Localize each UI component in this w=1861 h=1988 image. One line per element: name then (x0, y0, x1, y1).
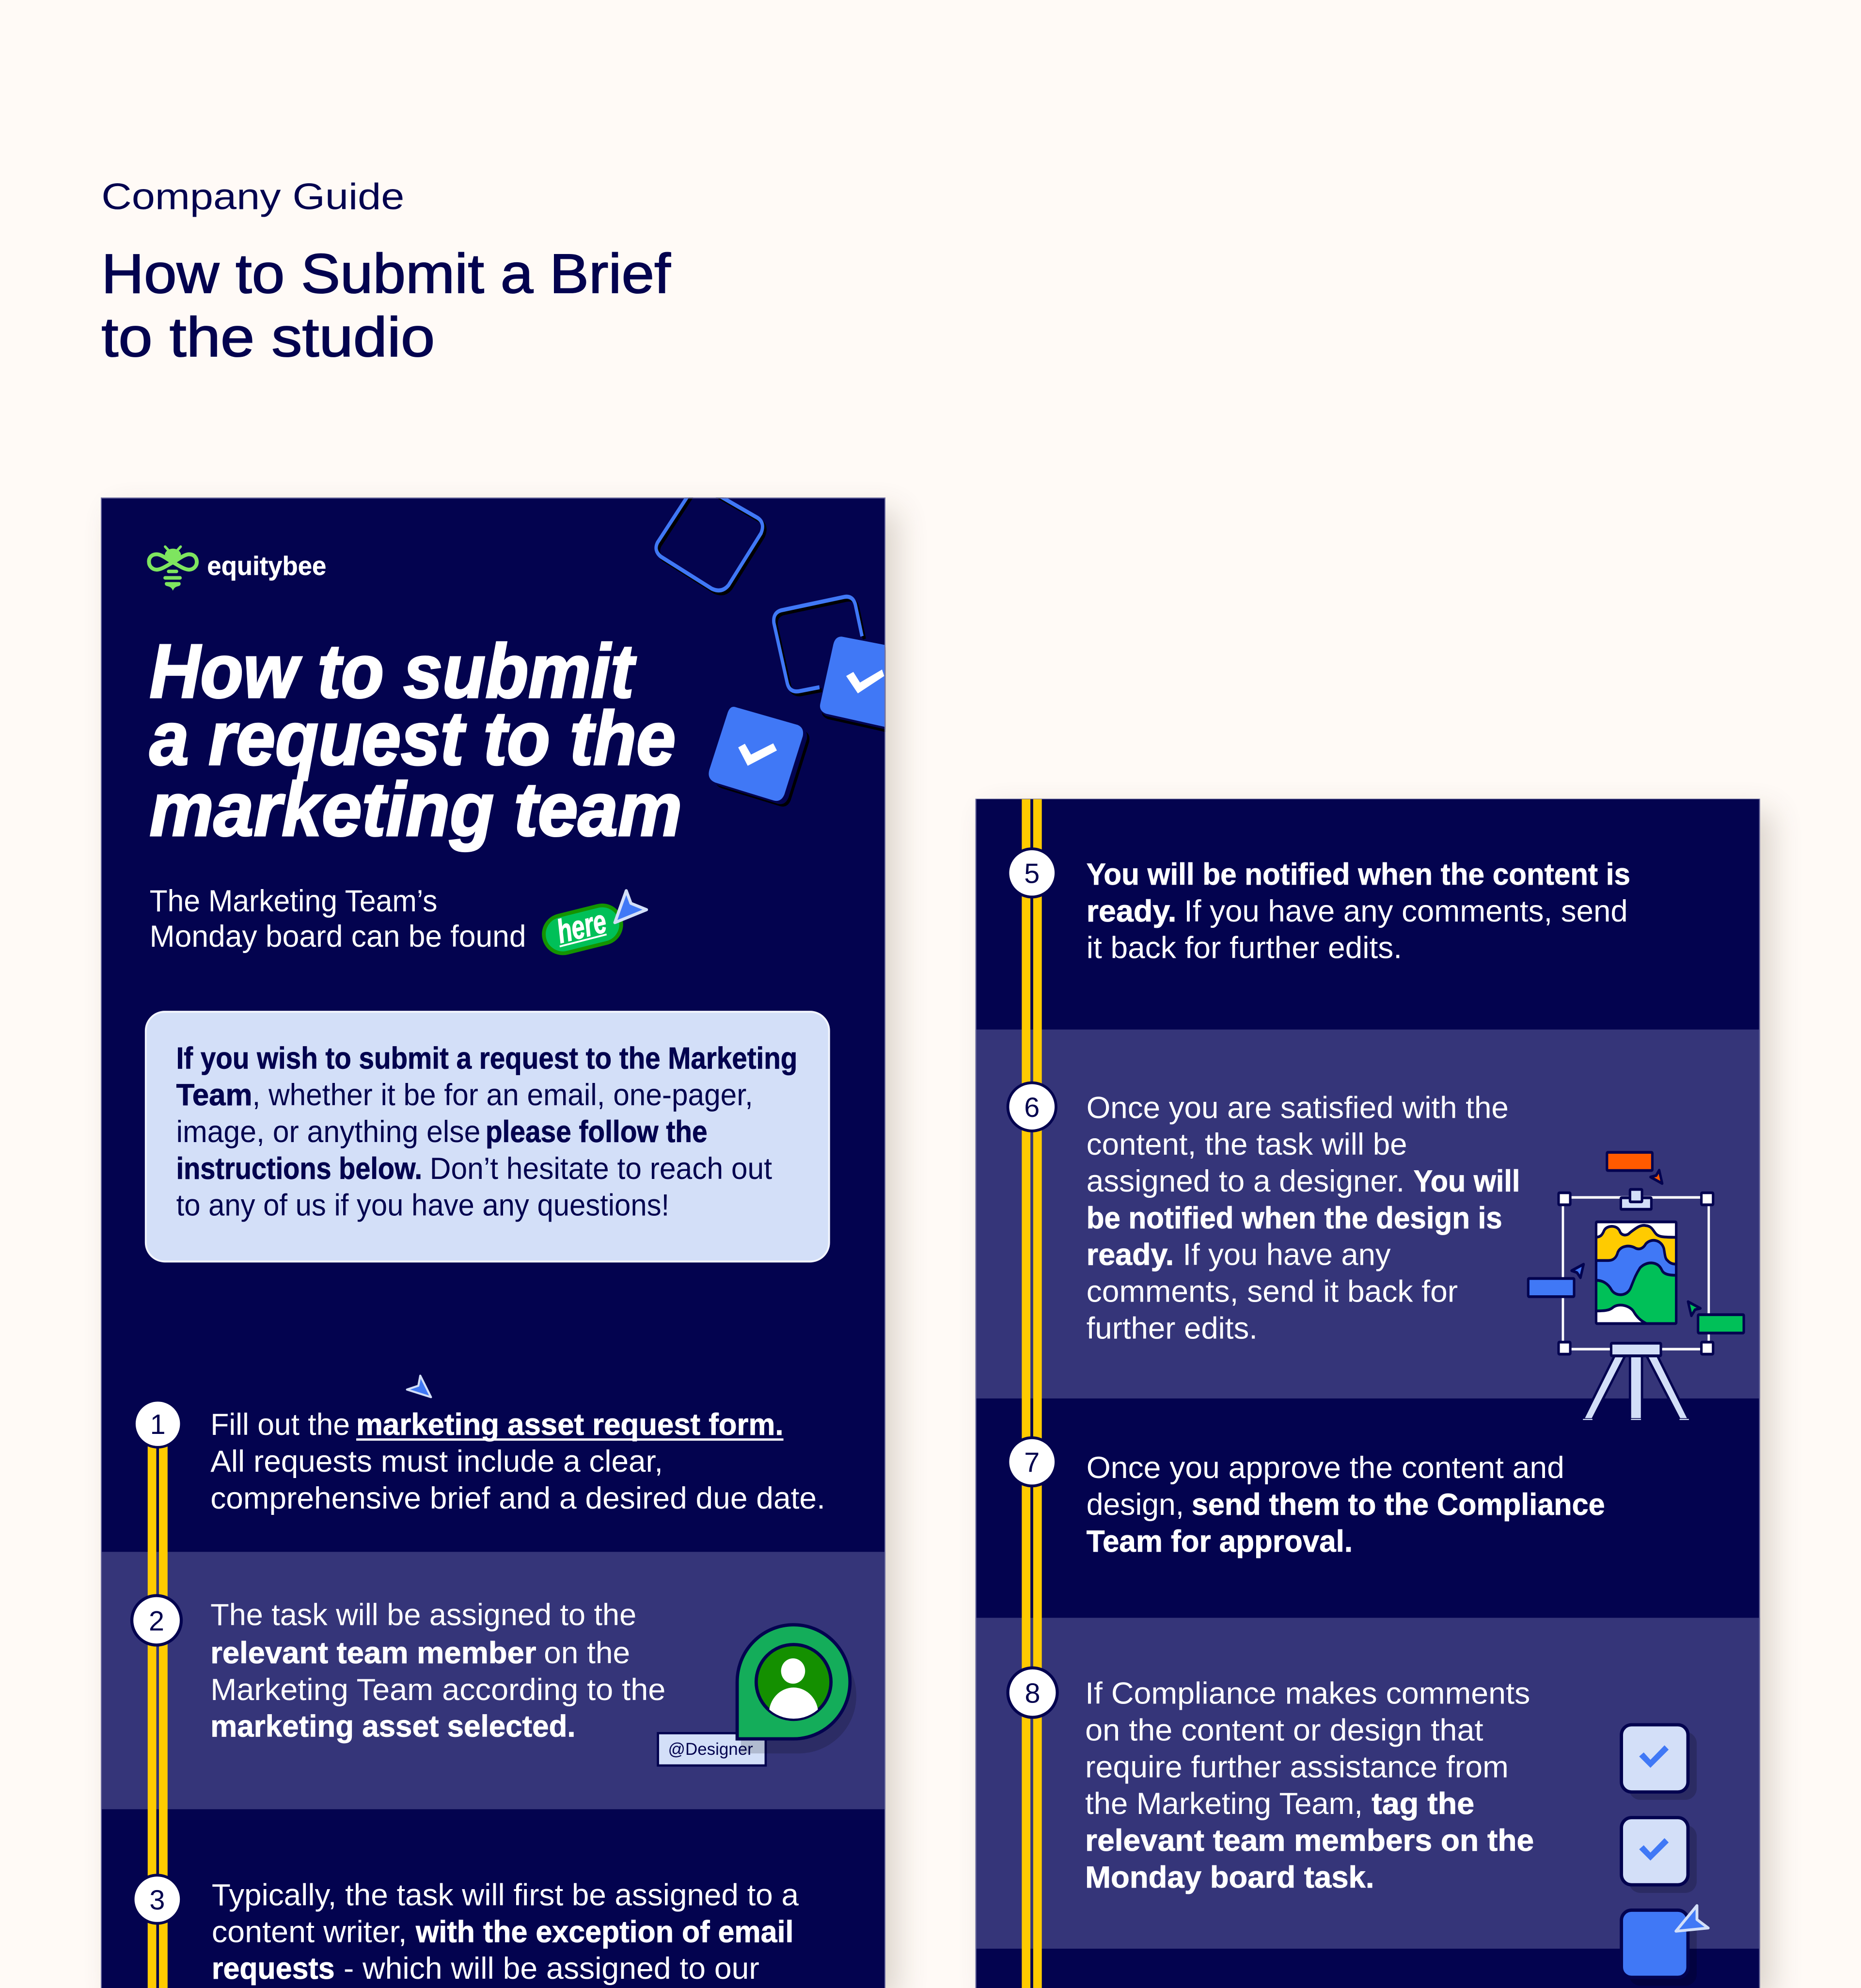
step 5 text: You will be notified when the content is (1087, 858, 1630, 891)
step 8 text: tag the (1372, 1787, 1474, 1821)
page heading (101, 176, 671, 368)
step 7 text (1087, 1451, 1605, 1559)
green label and cursor (1688, 1302, 1744, 1333)
step 6 text (1087, 1091, 1520, 1345)
button: here (540, 891, 647, 957)
panel background (101, 497, 885, 1988)
headline: marketing team (150, 767, 682, 852)
callout: intro box: Team (176, 1078, 252, 1112)
icons: floating checkboxes (656, 482, 887, 807)
step 1 (134, 1400, 825, 1515)
callout: intro box: , whether it be for an email, one-pager, (252, 1078, 753, 1112)
step 3 text (212, 1878, 799, 1986)
callout: intro box: to any of us if you have any questions! (176, 1189, 669, 1223)
badge 7: 7 (1024, 1447, 1040, 1479)
badge 1 (134, 1400, 181, 1447)
step 2 text: The task will be assigned to the (210, 1598, 636, 1632)
badge 3 (133, 1875, 181, 1924)
step 6 band (976, 1030, 1760, 1399)
tag: @Designer (658, 1733, 766, 1765)
callout: intro box: Don’t hesitate to reach out (430, 1152, 772, 1186)
wordmark: equitybee (207, 551, 326, 581)
badge 3: 3 (149, 1885, 165, 1916)
callout: intro box: instructions below. (176, 1152, 422, 1186)
step 2 text: Marketing Team according to the (210, 1673, 665, 1707)
badge 7 (1008, 1438, 1056, 1486)
icon: designer pin (658, 1625, 856, 1765)
badge 1: 1 (150, 1409, 166, 1440)
step 6 text: If you have any (1183, 1238, 1391, 1272)
panel border (101, 498, 885, 1988)
easel clamp (1621, 1190, 1651, 1209)
step 8 (1008, 1668, 1708, 1986)
step 7 text: Once you approve the content and (1087, 1451, 1564, 1485)
icon: bee (149, 547, 197, 591)
callout: intro box (146, 1012, 829, 1261)
step 6 text: be notified when the design is (1087, 1201, 1502, 1235)
step 8 text: If Compliance makes comments (1085, 1677, 1530, 1711)
step 1 text: Fill out the (210, 1408, 350, 1442)
callout: intro box: If you wish to submit a request to the Marketing (176, 1041, 797, 1075)
icon: design easel (1528, 1152, 1744, 1419)
step 6 text: further edits. (1087, 1311, 1258, 1345)
badge 8: 8 (1025, 1678, 1041, 1709)
icon: blue checked box left (709, 707, 809, 807)
step 6 text: ready. (1087, 1238, 1174, 1272)
step 3 (133, 1875, 799, 1986)
step 5 text (1087, 858, 1630, 965)
artboard frame (1563, 1197, 1709, 1349)
step 5 (1008, 849, 1630, 965)
step 3 text: with the exception of email (415, 1915, 793, 1949)
step 8 text: relevant team members on the (1085, 1824, 1534, 1858)
badge 6 (1008, 1083, 1056, 1131)
subhead: board link text: The Marketing Team’s (150, 884, 437, 918)
title line 1: How to Submit a Brief (101, 243, 671, 305)
step 5 text: If you have any comments, send (1184, 894, 1628, 928)
step 8 text: Monday board task. (1085, 1861, 1374, 1894)
step 8 text: the Marketing Team, (1085, 1787, 1363, 1821)
step 5 text: it back for further edits. (1087, 931, 1402, 965)
panel: left guide page (101, 482, 887, 1988)
badge 6: 6 (1024, 1092, 1040, 1123)
blue label and cursor (1528, 1264, 1584, 1297)
step 3 text: Typically, the task will first be assigned to a (212, 1878, 799, 1912)
step 5 text: ready. (1087, 894, 1176, 928)
step 6 text: assigned to a designer. (1087, 1164, 1404, 1198)
button: here: here (553, 903, 610, 950)
subhead: board link text: Monday board can be found (150, 920, 526, 954)
icon: cursor (615, 891, 647, 922)
icon: blue checked box right (820, 636, 887, 732)
panel: right guide page (976, 793, 1760, 1988)
timeline: left yellow rail (148, 1439, 168, 1988)
step 8 band (976, 1618, 1760, 1949)
checked box 2 (1622, 1817, 1697, 1893)
badge 5: 5 (1024, 859, 1040, 890)
step 6 text: content, the task will be (1087, 1128, 1407, 1161)
step 2 text (210, 1598, 665, 1744)
step 7 text: design, (1087, 1488, 1184, 1522)
step 2 text: relevant team member (210, 1636, 536, 1670)
step 6 (1008, 1083, 1744, 1419)
step 1 text (210, 1408, 825, 1515)
eyebrow: company guide: Company Guide (101, 176, 404, 218)
step 6 text: Once you are satisfied with the (1087, 1091, 1509, 1125)
orange label and cursor (1607, 1152, 1662, 1183)
step 8 text (1085, 1677, 1534, 1894)
step 6 text: You will (1414, 1164, 1520, 1198)
step 2 text: marketing asset selected. (210, 1710, 576, 1744)
unchecked blue box (1622, 1910, 1697, 1986)
callout: intro box: image, or anything else (176, 1115, 480, 1149)
step 6 text: comments, send it back for (1087, 1275, 1458, 1309)
icon: cursor (1676, 1906, 1708, 1931)
headline: How to submit (150, 629, 636, 714)
checked box 1 (1622, 1725, 1697, 1800)
panel: right page shadow (989, 811, 1772, 1988)
step 3 text: requests (212, 1952, 335, 1986)
panel background (976, 799, 1760, 1988)
icon: checklist (1622, 1725, 1708, 1986)
tag: @Designer: @Designer (668, 1740, 753, 1759)
callout: intro box: please follow the (486, 1115, 708, 1149)
headline: a request to the (150, 696, 676, 781)
panel border (976, 799, 1760, 1988)
timeline: right yellow rail (1022, 793, 1042, 1988)
step 8 text: require further assistance from (1085, 1750, 1509, 1784)
step 7 text: Team for approval. (1087, 1525, 1353, 1559)
canvas artwork (1595, 1222, 1677, 1325)
step 7 (1008, 1438, 1605, 1559)
step 3 text: - which will be assigned to our (344, 1952, 759, 1986)
title line 2: to the studio (101, 306, 435, 368)
step 2 text: on the (544, 1636, 630, 1670)
step 1 text: comprehensive brief and a desired due date. (210, 1481, 825, 1515)
easel legs (1583, 1356, 1689, 1419)
step 7 text: send them to the Compliance (1192, 1488, 1605, 1522)
logo: equitybee (149, 547, 326, 591)
step 1 text: marketing asset request form. (356, 1408, 784, 1442)
icon: outline checkbox right (774, 597, 865, 694)
badge 2: 2 (149, 1606, 164, 1637)
badge 8 (1008, 1668, 1057, 1718)
subhead: board link text (150, 884, 526, 954)
icon: small cursor (407, 1376, 431, 1397)
step 2 band (101, 1552, 885, 1809)
headline (150, 629, 682, 852)
icon: outline checkbox top (656, 482, 765, 593)
step 2 (132, 1596, 856, 1765)
step 1 text: All requests must include a clear, (210, 1445, 663, 1479)
step 8 text: on the content or design that (1085, 1713, 1483, 1747)
step 3 text: content writer, (212, 1915, 407, 1949)
badge 2 (132, 1596, 181, 1645)
badge 5 (1008, 849, 1056, 897)
panel: left page shadow (114, 511, 898, 1988)
